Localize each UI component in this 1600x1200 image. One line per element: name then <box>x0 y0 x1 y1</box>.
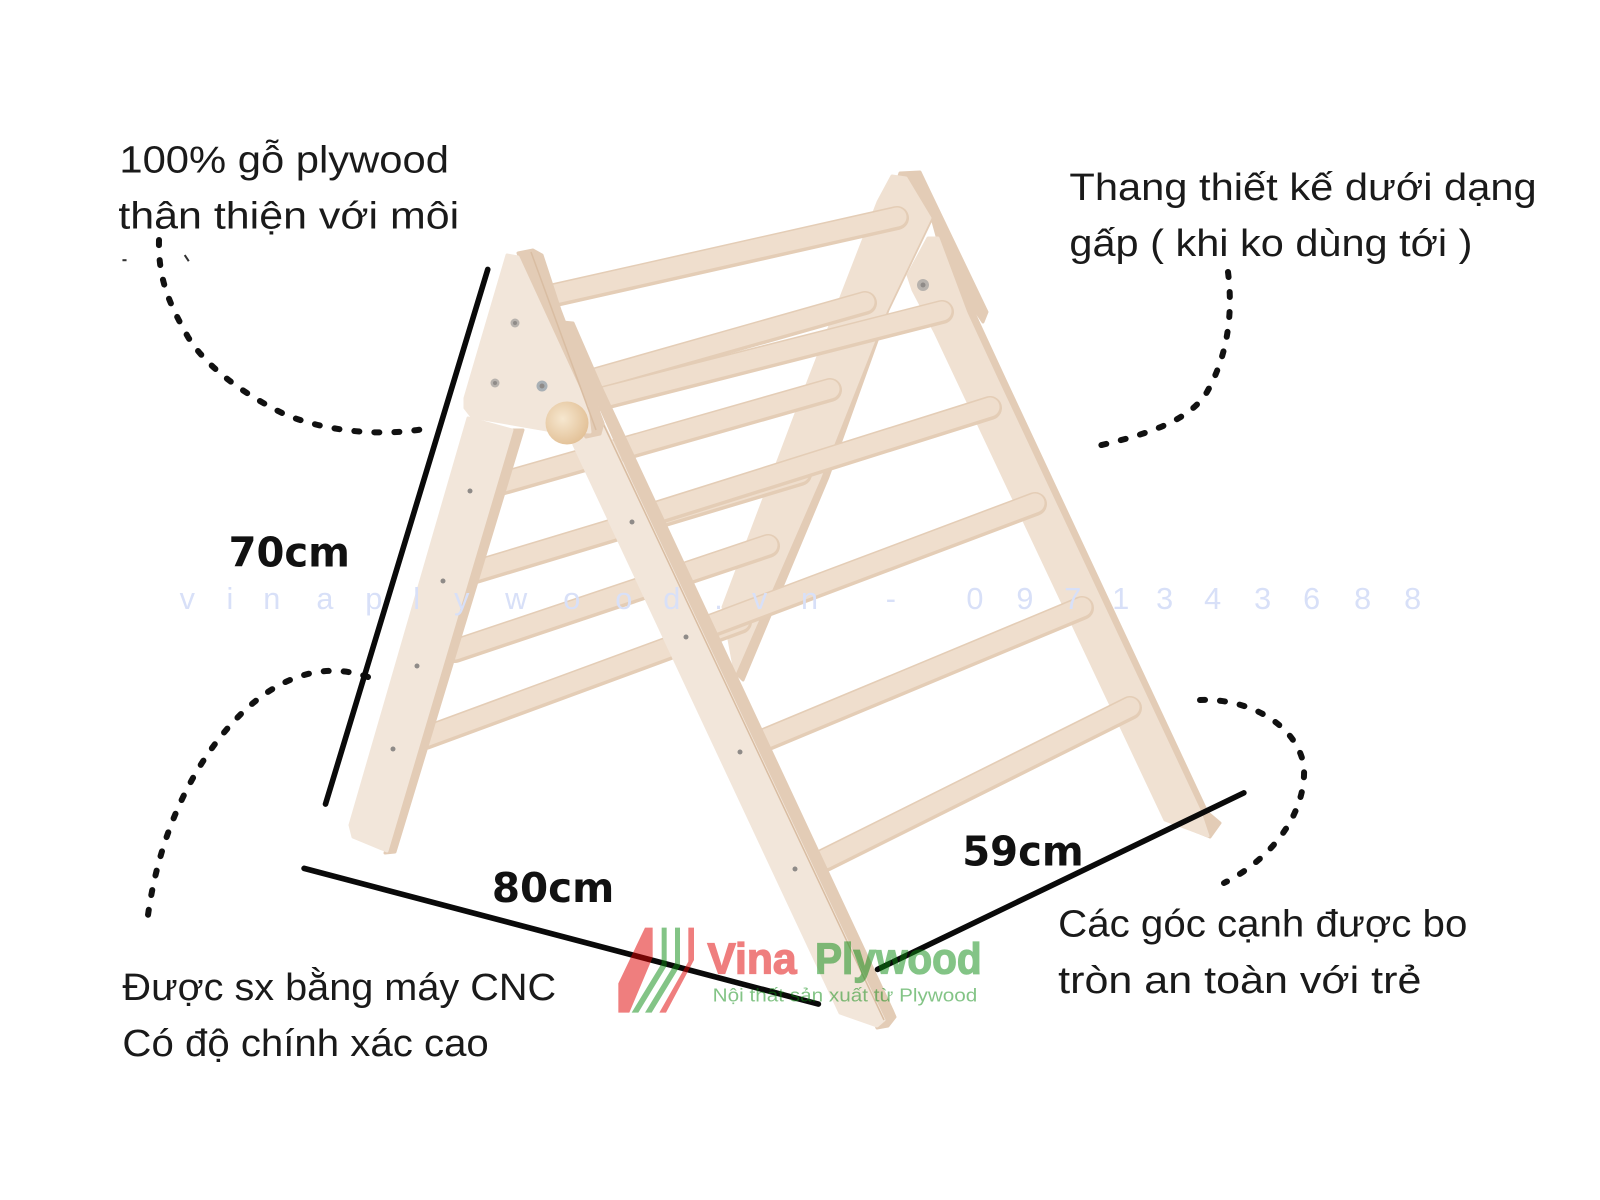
dashed leader: rounded corners note <box>1200 700 1304 883</box>
text: CNC note <box>122 966 556 1064</box>
illustration: folding wooden climbing ladder <box>350 172 1220 1028</box>
watermark: vinaplywood.vn-0971343688 <box>180 582 1421 616</box>
text: plywood note: thân thiện với môi <box>118 195 459 237</box>
logo wordmark Plywood: Plywood <box>815 934 982 983</box>
text: rounded corners note: tròn an toàn với trẻ <box>1058 959 1421 1001</box>
dashed leader: folding note <box>1093 272 1230 447</box>
text: folding note: Thang thiết kế dưới dạng <box>1069 166 1537 208</box>
logo wordmark Vina: Vina <box>707 934 797 983</box>
text: CNC note: Có độ chính xác cao <box>122 1022 489 1064</box>
text: plywood note <box>118 138 459 261</box>
front right leg <box>550 322 895 1028</box>
logo: Vina Plywood <box>618 928 982 1013</box>
text: rounded corners note: Các góc cạnh được bo <box>1058 903 1467 945</box>
logo mark <box>618 928 694 1013</box>
text: rounded corners note <box>1058 903 1467 1001</box>
text: folding note: gấp ( khi ko dùng tới ) <box>1069 222 1472 264</box>
back left leg and apex <box>723 172 987 680</box>
left frame rungs <box>425 217 897 738</box>
logo tagline: Nội thất sản xuất từ Plywood <box>713 985 977 1006</box>
text: CNC note: Được sx bằng máy CNC <box>122 966 556 1008</box>
front top triangular plate <box>465 250 603 437</box>
right frame rungs <box>600 311 1130 860</box>
back right leg with top plate <box>908 238 1220 837</box>
dimension line: width <box>304 868 818 1004</box>
dimension label 70cm: 70cm <box>229 528 350 576</box>
text: folding note <box>1069 166 1537 264</box>
text: plywood note: 100% gỗ plywood <box>119 138 449 180</box>
dashed leader: CNC note <box>148 671 368 915</box>
dimension label 59cm: 59cm <box>962 827 1084 875</box>
dimension label 80cm: 80cm <box>492 864 614 912</box>
dashed leader: plywood note <box>159 240 424 432</box>
dimension line: depth <box>878 793 1244 969</box>
front left leg <box>350 418 523 853</box>
dimension line: height <box>326 269 488 804</box>
wooden knob <box>546 402 588 444</box>
